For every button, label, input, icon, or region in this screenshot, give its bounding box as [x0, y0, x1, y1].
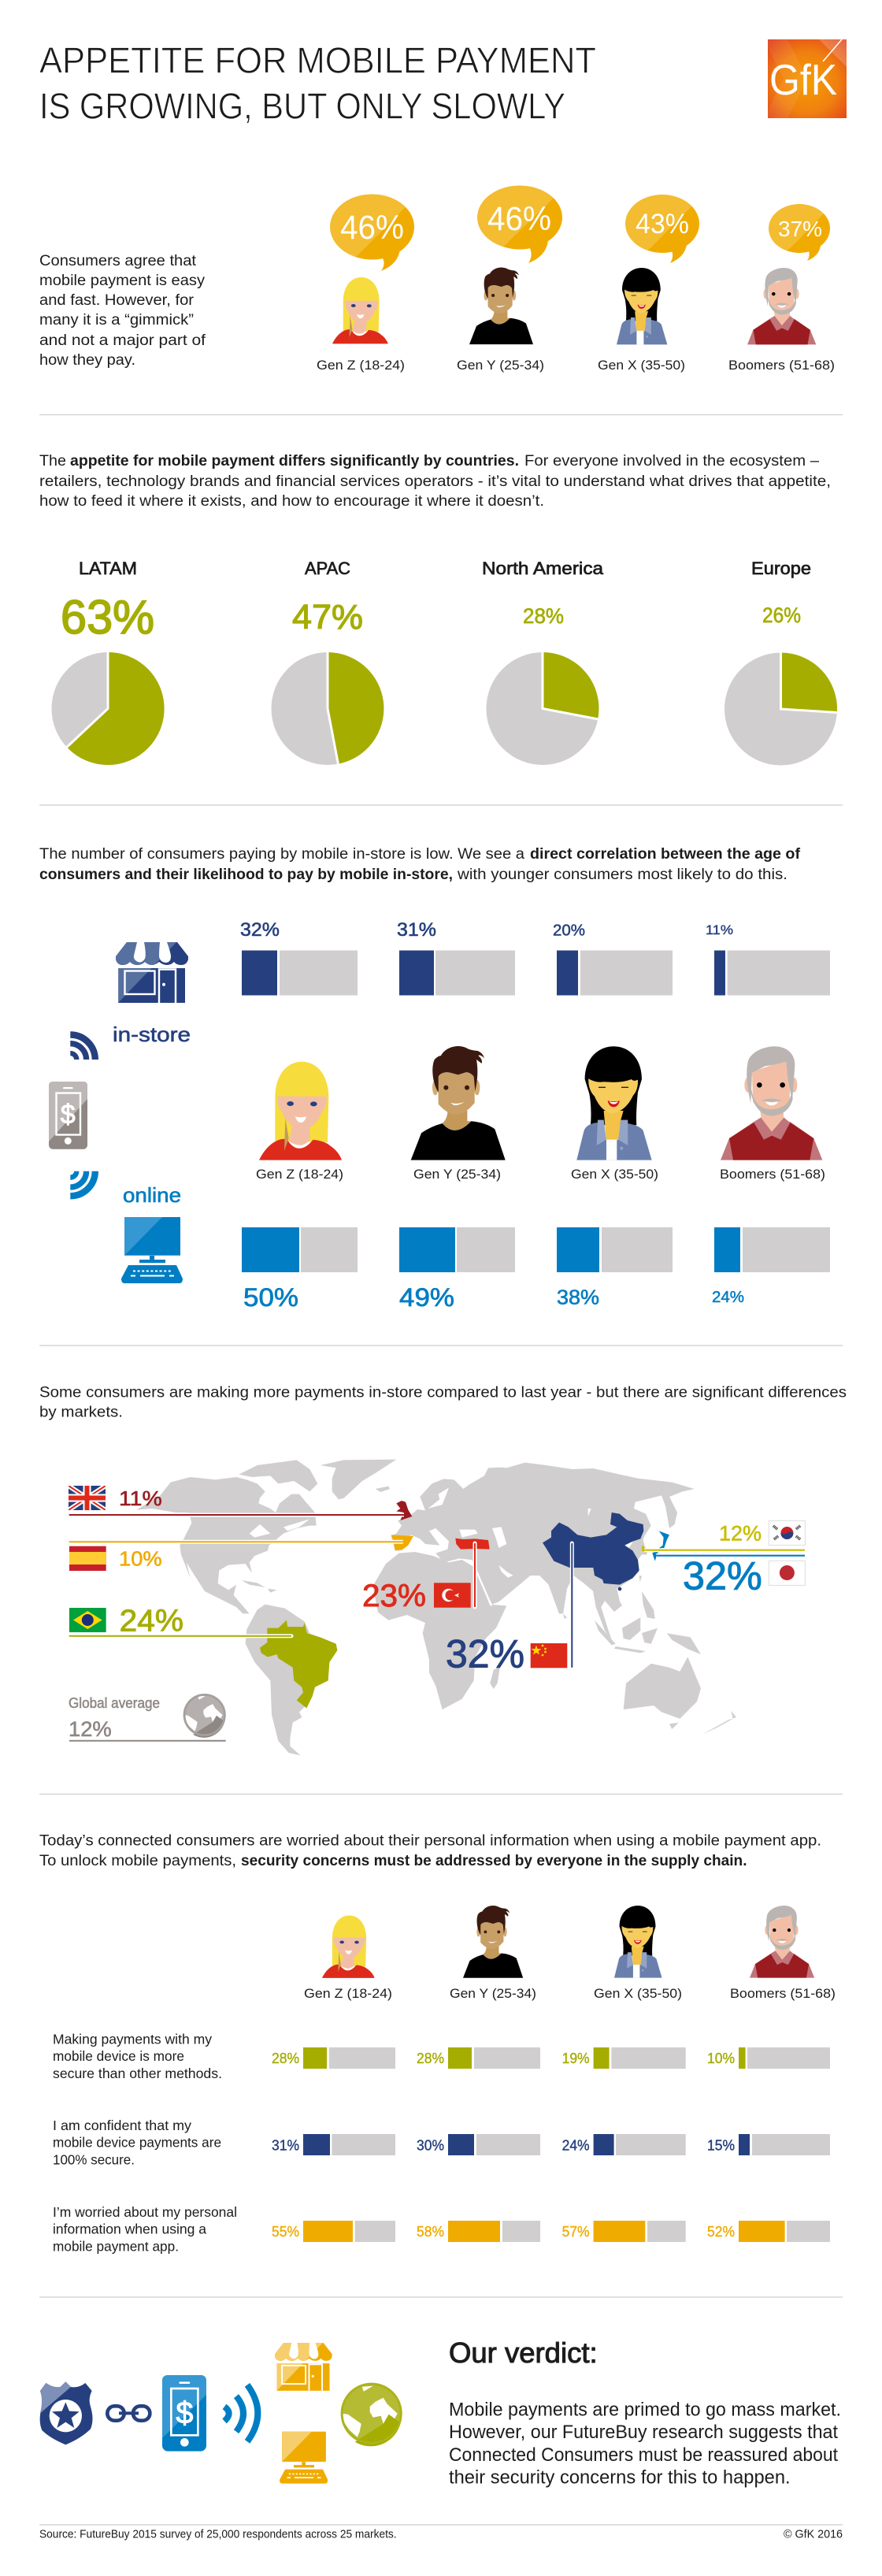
- icon: grey phone: $: [61, 1100, 76, 1130]
- icon: blue phone: [162, 2375, 206, 2452]
- text block: verdict body: [449, 2400, 841, 2489]
- map: Spain: [391, 1535, 413, 1550]
- text block: consumers agree: Consumers agree that: [39, 253, 197, 269]
- age labels: Gen Y (25-34): [450, 1986, 536, 2001]
- speech bubble: Gen X 43%: [625, 195, 699, 263]
- callout: global average 12%: [69, 1694, 226, 1741]
- text block: direct correlation: direct correlation between the age of: [530, 846, 801, 863]
- text block: verdict body: their security concerns for this to happen.: [449, 2467, 791, 2489]
- text block: security concerns: security concerns must be addressed by everyone in the supply chain.: [241, 1853, 747, 1869]
- pie: LATAM 63%: LATAM: [79, 559, 137, 578]
- age labels: Gen Z (18-24): [256, 1167, 343, 1182]
- footer: source and copyright: © GfK 2016: [784, 2528, 843, 2541]
- bar: online Gen Z 50%: 50%: [243, 1283, 298, 1312]
- text block: verdict body: Connected Consumers must be reassured about: [449, 2444, 838, 2466]
- text block: differences by markets: by markets.: [39, 1404, 123, 1421]
- callout: South Korea 12%: [644, 1520, 805, 1550]
- row: confident 100% secure: 30%: [417, 2138, 444, 2154]
- bar: in-store Boomers 11%: 11%: [706, 922, 733, 937]
- row: confident 100% secure: [53, 2118, 830, 2168]
- person: Gen Y large: [411, 1046, 506, 1160]
- text block: appetite differs by country: retailers, technology brands and financial services operators - it’s vital to understand what drives that appetite,: [39, 473, 831, 490]
- callout: Spain 10%: 10%: [119, 1547, 162, 1571]
- bar: online Gen Y 49%: 49%: [399, 1283, 454, 1312]
- bar: online Gen X 38%: [557, 1227, 673, 1309]
- person: Boomers: [747, 268, 816, 344]
- icon: shield: [40, 2381, 92, 2444]
- row: confident 100% secure: 15%: [707, 2138, 735, 2154]
- age labels: Gen X (35-50): [594, 1986, 682, 2001]
- icon: yellow computer: [280, 2432, 328, 2484]
- map: Turkey: [455, 1539, 490, 1550]
- map: Japan: [652, 1531, 669, 1561]
- logo: GfK: GfK: [769, 55, 837, 104]
- text block: consumers agree: many it is a “gimmick”: [39, 312, 194, 328]
- row: worried about personal information: 55%: [272, 2224, 299, 2240]
- age labels: Gen X (35-50): [598, 358, 685, 373]
- bar: online Gen Y 49%: [399, 1227, 515, 1312]
- text block: security concerns: To unlock mobile payments,: [39, 1853, 236, 1869]
- row: more secure than other methods: [53, 2031, 830, 2081]
- row: more secure than other methods: secure than other methods.: [53, 2066, 222, 2081]
- icon: grey globe: [183, 1694, 226, 1738]
- callout: UK 11%: [69, 1486, 404, 1515]
- title: [39, 39, 596, 126]
- icon: chain link: [107, 2406, 150, 2421]
- speech bubble: Gen X 43%: 43%: [636, 209, 689, 239]
- panel: verdict: [40, 2337, 841, 2489]
- text block: verdict body: Mobile payments are primed to go mass market.: [449, 2400, 841, 2421]
- icons: security to payment chain: [40, 2375, 258, 2452]
- text block: verdict body: However, our FutureBuy research suggests that: [449, 2422, 838, 2443]
- callout: Turkey 23%: 23%: [362, 1579, 426, 1613]
- row: worried about personal information: mobile payment app.: [53, 2238, 179, 2254]
- callout: Turkey 23%: [362, 1543, 475, 1613]
- text block: consumers agree: and fast. However, for: [39, 292, 195, 309]
- person: Gen X large: [576, 1046, 652, 1160]
- speech bubble: Gen Y 46%: 46%: [487, 200, 551, 238]
- callout: China 32%: 32%: [446, 1632, 524, 1676]
- map: China: [543, 1513, 643, 1591]
- icon: store: [116, 942, 188, 1003]
- pie: Europe 26%: 26%: [762, 603, 801, 627]
- bar: online Gen X 38%: 38%: [557, 1286, 599, 1309]
- row: more secure than other methods: mobile device is more: [53, 2048, 184, 2064]
- row: worried about personal information: information when using a: [53, 2222, 206, 2237]
- age labels: Gen Y (25-34): [413, 1167, 501, 1182]
- icon: grey phone: [49, 1082, 87, 1149]
- map: Americas: [136, 1460, 396, 1755]
- speech bubble: Boomers 37%: 37%: [778, 217, 822, 241]
- icon: computer: [121, 1217, 183, 1283]
- speech bubble: Gen Z 46%: 46%: [340, 209, 404, 247]
- icon: yellow store: [275, 2343, 332, 2391]
- row: confident 100% secure: 100% secure.: [53, 2152, 135, 2168]
- callout: Brazil 24%: 24%: [120, 1605, 183, 1639]
- bar: in-store Gen Z 32%: 32%: [240, 919, 280, 941]
- text block: appetite differs by country: For everyone involved in the ecosystem –: [524, 453, 819, 470]
- icon: green globe: [341, 2383, 402, 2446]
- bar: online Boomers 24%: 24%: [712, 1289, 744, 1306]
- pie: LATAM 63%: 63%: [61, 591, 154, 644]
- callout: global average 12%: Global average: [69, 1695, 160, 1711]
- row: confident 100% secure: I am confident that my: [53, 2118, 191, 2133]
- person: Gen X small: [614, 1906, 662, 1978]
- text block: differences by markets: [39, 1385, 847, 1421]
- label: online: online: [123, 1183, 181, 1207]
- callout: UK 11%: 11%: [119, 1487, 162, 1510]
- speech bubble: Gen Y 46%: [477, 186, 562, 263]
- age labels: Gen Y (25-34): [457, 358, 544, 373]
- pie: APAC 47%: APAC: [305, 559, 350, 578]
- bar: online Boomers 24%: [712, 1227, 830, 1306]
- text block: appetite differs by country: appetite for mobile payment differs significantly by countries.: [70, 453, 519, 470]
- age labels: [304, 1986, 836, 2001]
- panel: in-store vs online: [39, 846, 830, 1312]
- map: South Asia, Oceania and South-East Asia: [549, 1577, 736, 1735]
- age labels: Gen X (35-50): [571, 1167, 658, 1182]
- age labels: Gen Z (18-24): [317, 358, 405, 373]
- age labels: Boomers (51-68): [720, 1167, 825, 1182]
- text block: differences by markets: Some consumers are making more payments in-store compared to last year - but there are significant differences: [39, 1385, 847, 1401]
- bar: in-store Gen X 20%: [553, 922, 673, 996]
- callout: Japan 32%: [656, 1554, 805, 1598]
- bar: online Gen Z 50%: [242, 1227, 358, 1312]
- pie: APAC 47%: 47%: [292, 598, 363, 637]
- text block: appetite differs by country: how to feed it where it exists, and how to encourage it where it doesn’t.: [39, 493, 544, 510]
- text block: security concerns: [39, 1832, 821, 1869]
- text block: consumers agree: [39, 253, 206, 369]
- person: Gen X: [617, 268, 667, 344]
- row: worried about personal information: 52%: [707, 2224, 735, 2240]
- pie: APAC 47%: [271, 559, 384, 765]
- row: more secure than other methods: Making payments with my: [53, 2031, 212, 2047]
- row: more secure than other methods: 19%: [562, 2051, 590, 2066]
- row: more secure than other methods: 28%: [272, 2051, 299, 2066]
- callout: China 32%: [446, 1543, 572, 1676]
- text block: direct correlation: consumers and their likelihood to pay by mobile in-store,: [39, 867, 453, 883]
- icon: wireless waves: [224, 2385, 258, 2441]
- age labels: Boomers (51-68): [728, 358, 835, 373]
- title: IS GROWING, BUT ONLY SLOWLY: [39, 85, 565, 126]
- text block: security concerns: Today’s connected consumers are worried about their personal information when using a mobile payment app.: [39, 1832, 821, 1850]
- panel: in-store payments by market: [39, 1385, 847, 1755]
- text block: direct correlation: The number of consumers paying by mobile in-store is low. We see a: [39, 846, 524, 863]
- title: APPETITE FOR MOBILE PAYMENT: [39, 39, 596, 80]
- icon: blue phone: $: [176, 2396, 193, 2430]
- pie: North America 28%: [482, 559, 604, 765]
- age labels: Boomers (51-68): [730, 1986, 836, 2001]
- person: Gen Z: [332, 277, 388, 343]
- footer: source and copyright: Source: FutureBuy 2015 survey of 25,000 respondents across 25 markets.: [39, 2528, 397, 2541]
- map: Korea: [642, 1546, 647, 1553]
- label: in-store: in-store: [113, 1023, 191, 1046]
- row: worried about personal information: 58%: [417, 2224, 444, 2240]
- bar: in-store Gen Y 31%: 31%: [397, 919, 436, 941]
- person: Gen Y small: [463, 1906, 523, 1978]
- speech bubble: Gen Z 46%: [330, 194, 414, 271]
- row: confident 100% secure: mobile device payments are: [53, 2135, 221, 2151]
- pie: North America 28%: North America: [482, 559, 604, 578]
- callout: Brazil 24%: [69, 1605, 291, 1639]
- bar: in-store Gen Z 32%: [240, 919, 358, 996]
- row: worried about personal information: I’m worried about my personal: [53, 2204, 237, 2220]
- row: confident 100% secure: 31%: [272, 2138, 299, 2154]
- person: Gen Y: [469, 267, 533, 344]
- text block: appetite differs by country: The: [39, 453, 66, 470]
- person: Gen Z large: [259, 1062, 342, 1160]
- world map: [136, 1460, 695, 1755]
- callout: Spain 10%: [69, 1542, 403, 1571]
- text block: direct correlation: with younger consumers most likely to do this.: [457, 867, 788, 883]
- age labels: [317, 358, 835, 373]
- callout: South Korea 12%: 12%: [719, 1522, 762, 1546]
- bar: in-store Gen X 20%: 20%: [553, 922, 585, 939]
- map: UK: [396, 1501, 412, 1520]
- text block: consumers agree: how they pay.: [39, 352, 135, 369]
- person: Boomers large: [721, 1046, 822, 1160]
- pie: Europe 26%: Europe: [751, 559, 811, 578]
- row: confident 100% secure: 24%: [562, 2138, 590, 2154]
- bar: in-store Boomers 11%: [706, 922, 830, 996]
- logo: GfK: [768, 39, 847, 118]
- row: more secure than other methods: 28%: [417, 2051, 444, 2066]
- speech bubble: Boomers 37%: [769, 204, 830, 261]
- text block: consumers agree: and not a major part of: [39, 332, 206, 349]
- row: worried about personal information: [53, 2204, 830, 2254]
- bar: in-store Gen Y 31%: [397, 919, 515, 996]
- text block: appetite differs by country: [39, 453, 831, 510]
- pie: Europe 26%: [724, 559, 837, 766]
- age labels: [256, 1167, 825, 1182]
- person: Boomers small: [750, 1906, 814, 1978]
- heading: our verdict: Our verdict:: [449, 2337, 598, 2369]
- panel: appetite by region: [39, 453, 837, 766]
- pie: North America 28%: 28%: [523, 604, 564, 628]
- panel: security concerns: [39, 1832, 836, 2254]
- text block: consumers agree: mobile payment is easy: [39, 273, 206, 289]
- person: Gen Z small: [322, 1916, 375, 1978]
- footer: source and copyright: [39, 2528, 843, 2541]
- text block: direct correlation: [39, 846, 801, 883]
- age labels: Gen Z (18-24): [304, 1986, 392, 2001]
- row: more secure than other methods: 10%: [707, 2051, 735, 2066]
- callout: global average 12%: 12%: [69, 1717, 112, 1741]
- panel: generational appetite: [39, 186, 835, 373]
- callout: Japan 32%: 32%: [683, 1554, 762, 1598]
- map: Eurasia and Africa: [372, 1463, 695, 1709]
- icon: wireless arcs to store: [70, 1035, 95, 1060]
- pie: LATAM 63%: [52, 559, 165, 765]
- icon: wireless arcs to computer: [70, 1171, 95, 1196]
- row: worried about personal information: 57%: [562, 2224, 590, 2240]
